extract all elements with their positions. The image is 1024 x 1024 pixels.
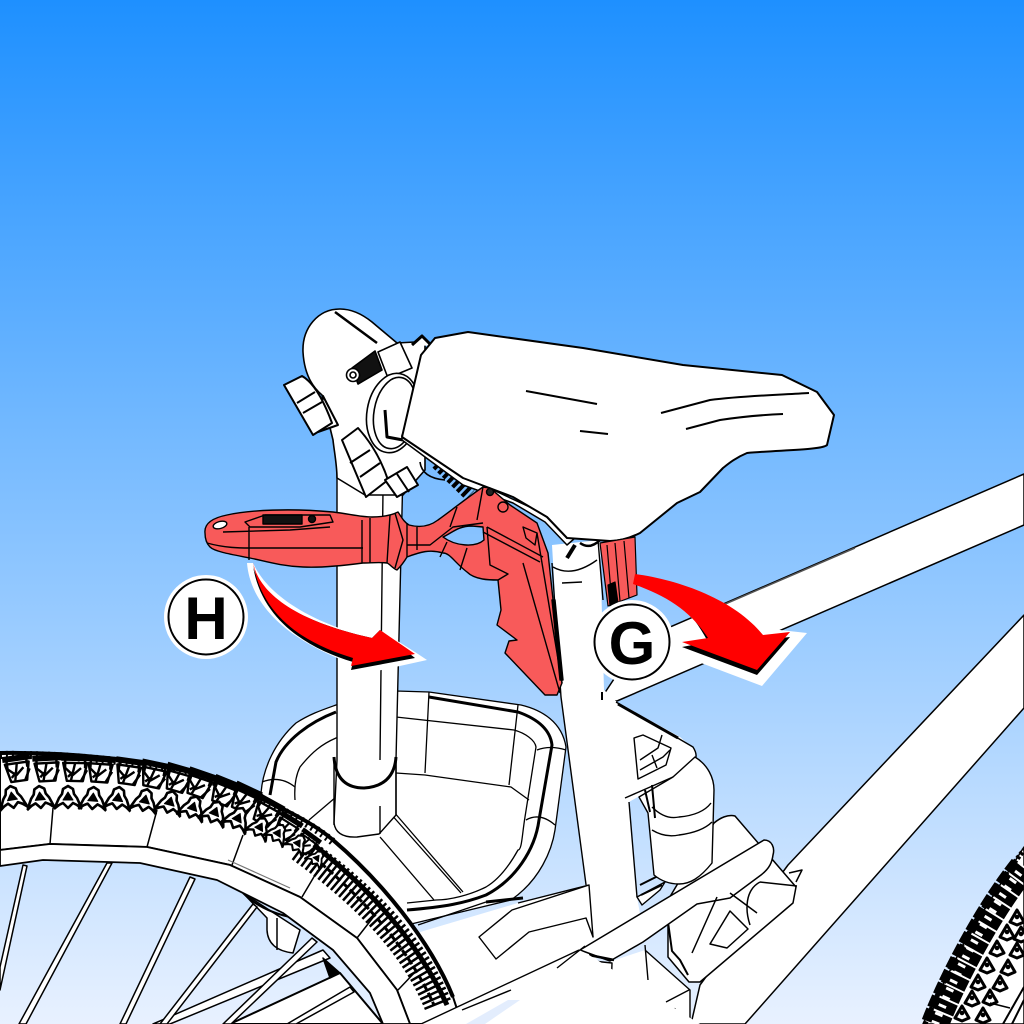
handle hole xyxy=(212,520,228,530)
rim xyxy=(0,844,410,1024)
front wheel tyre xyxy=(923,847,1024,1024)
bolt xyxy=(346,336,432,384)
red strip behind seat post xyxy=(600,537,637,606)
callout G: G xyxy=(609,610,655,677)
chain stay over wheel xyxy=(421,946,700,1024)
saddle xyxy=(402,332,834,541)
top tube xyxy=(600,474,1024,701)
rear wheel stays and spokes xyxy=(0,863,383,1024)
stand post xyxy=(334,460,403,837)
seat tube and post xyxy=(552,540,696,958)
clamp ring xyxy=(360,369,426,457)
handle slot xyxy=(245,515,333,527)
tread teeth xyxy=(300,848,438,1005)
tread knobs xyxy=(0,756,329,871)
rear shock xyxy=(639,757,714,884)
rocker back plate xyxy=(668,815,802,982)
lower frame block xyxy=(589,945,690,1024)
rear wheel tyre xyxy=(0,753,462,1024)
arrow H xyxy=(247,562,427,677)
callout H: H xyxy=(184,585,228,652)
saddle under-strip xyxy=(402,435,575,545)
spring xyxy=(420,462,470,495)
callout H xyxy=(164,575,248,659)
red lever tool xyxy=(205,487,563,695)
arrow G xyxy=(633,574,807,686)
bottom frame and swingarm xyxy=(410,875,691,1024)
shock window xyxy=(634,735,671,779)
knob: lower xyxy=(342,428,418,497)
rocker arm xyxy=(580,840,797,961)
knob: left xyxy=(284,376,338,435)
tray behind the post xyxy=(261,691,566,925)
down tube xyxy=(691,615,1024,1024)
callout G xyxy=(590,600,674,684)
clamp head and knobs xyxy=(284,309,470,497)
